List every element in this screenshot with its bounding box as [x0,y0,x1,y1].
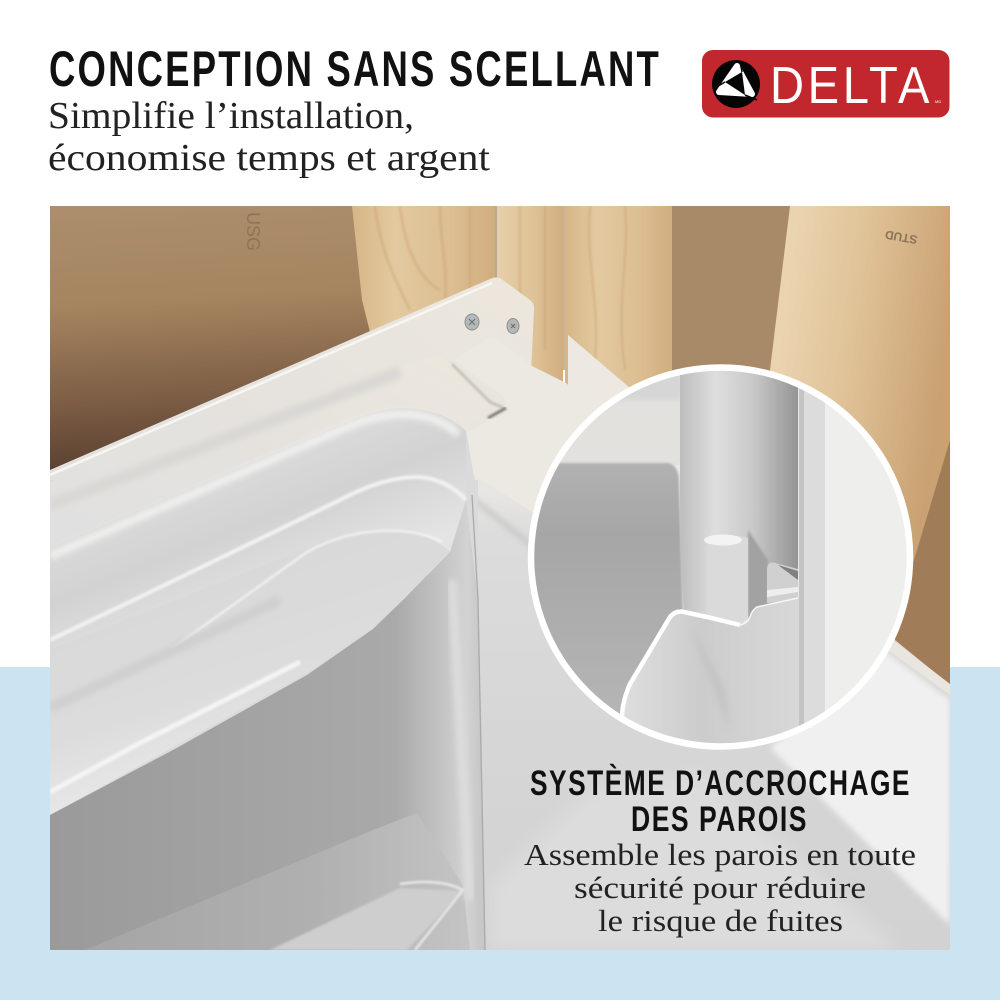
rim lower highlight [50,414,458,556]
column [680,365,798,625]
floor shade [498,848,872,942]
left panel detail [534,462,684,714]
seam white outline [622,612,740,718]
right wall and lower tub [474,478,950,950]
subtitle: économise temps et argent [48,137,490,179]
right white wall [825,365,920,755]
block shadow [478,498,528,546]
top left backdrop [560,402,680,465]
stud print: STUD [884,227,919,247]
screw: right [507,318,519,334]
right ledge top [885,640,950,695]
hook clip [767,563,798,603]
left tub panel [50,356,506,950]
bump highlight [704,534,742,546]
shelf shading [50,600,280,708]
lower shelf [85,813,470,950]
screw: left [465,314,479,330]
recess band [240,408,465,575]
shower wall: gray [50,500,485,950]
lower shelf front [270,888,462,950]
background band: pale blue [0,667,1000,1000]
shelf lip highlight [50,662,300,792]
wall print: USG [243,212,263,251]
title: CONCEPTION SANS SCELLANT [49,41,661,97]
shelf top [50,529,450,815]
rim outer shading [50,372,400,505]
callout text: sécurité pour réduire [574,870,866,905]
panel seam [472,495,485,950]
stud: left [352,206,495,340]
photo: tub wall corner installation [50,206,950,950]
callout heading [530,763,911,839]
logo: Delta: MD [935,99,941,104]
callout heading: DES PAROIS [631,800,808,839]
magnifier callout circle [525,360,920,760]
circle outline [531,368,910,746]
wall panel: lower right [895,420,950,690]
callout text: le risque de fuites [598,903,843,938]
white band [540,444,682,456]
rim tip corner [452,364,504,408]
subtitle: Simplifie l’installation, [48,95,414,137]
inner lip [50,477,466,640]
tub flange [50,277,534,480]
wall seal tab [568,335,629,410]
ledge highlight [770,648,950,925]
shadow beside lit strip [748,530,768,620]
upper rim [76,430,466,508]
lower lit section [622,597,800,760]
callout text [524,837,916,938]
corner column light [452,580,470,900]
flange highlight edge [50,283,492,475]
connector tab [508,366,587,512]
panel base [55,480,478,812]
wall panel: centre [672,206,790,371]
vertical trim [800,365,825,755]
lit strip under bump [707,535,748,625]
logo: Delta [702,50,950,118]
stud: centre pair [496,206,672,396]
stud: right [770,206,950,590]
subtitle [48,95,490,179]
triangular sheen [688,620,730,730]
callout text: Assemble les parois en toute [524,837,916,872]
back wall: brown board [50,206,370,470]
logo: Delta: DELTA [770,57,933,115]
